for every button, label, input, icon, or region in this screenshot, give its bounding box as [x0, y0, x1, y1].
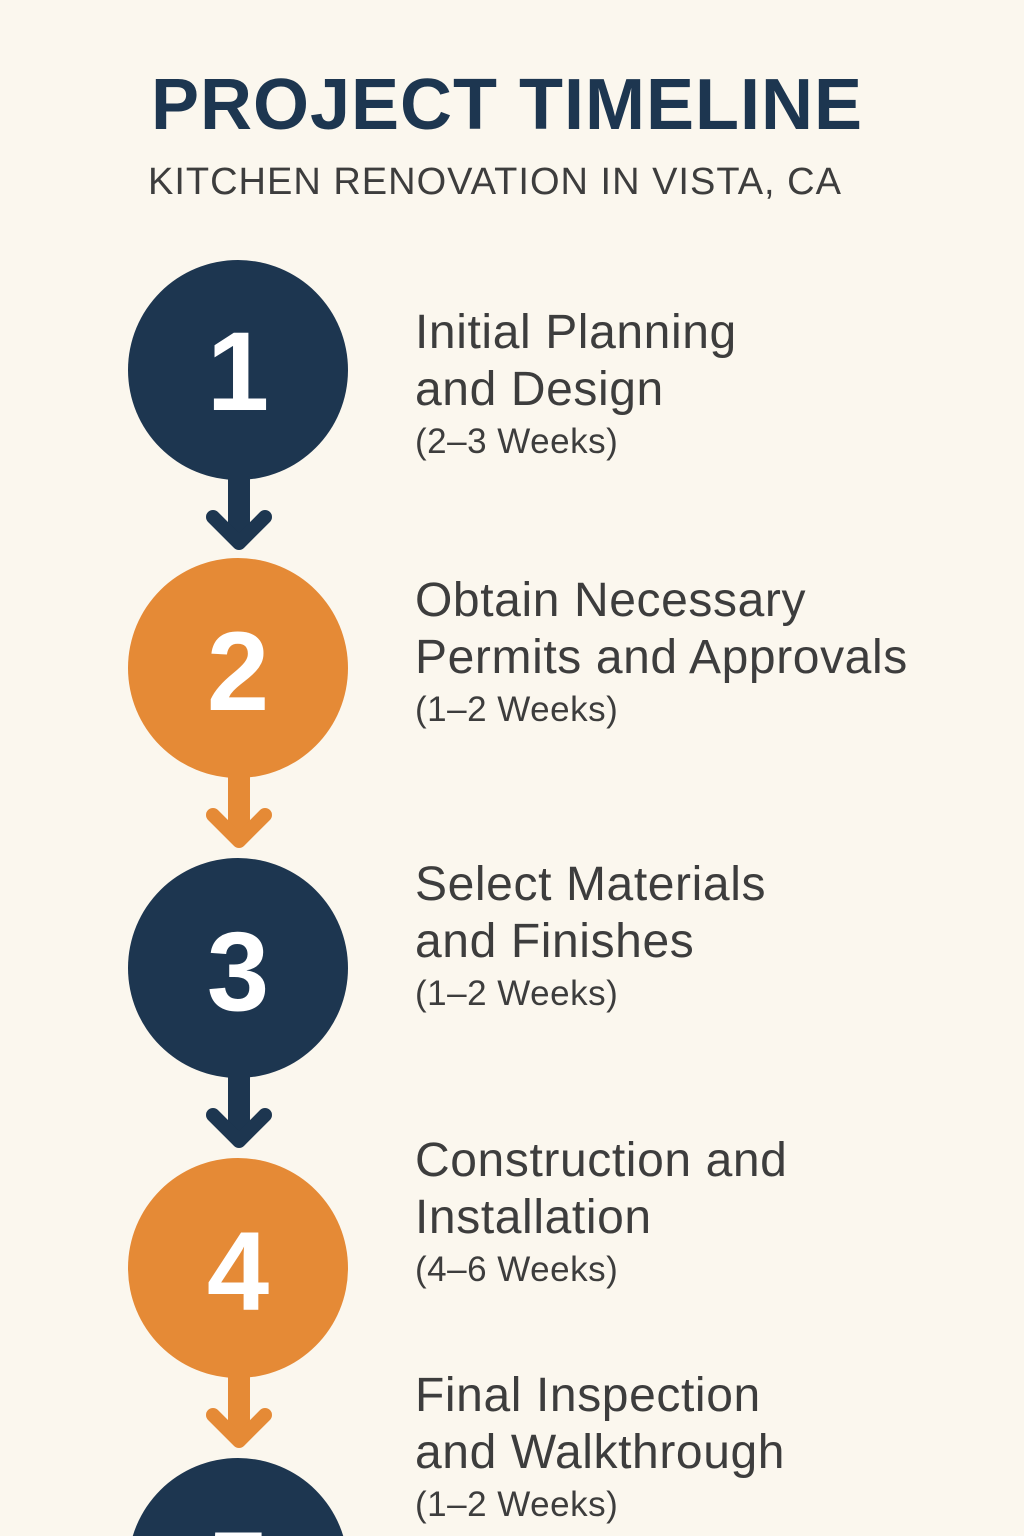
step 3 text: and Finishes — [415, 915, 694, 968]
step 1 text — [415, 306, 737, 461]
step 1 text: and Design — [415, 363, 664, 416]
step 2 text: Obtain Necessary — [415, 574, 806, 627]
step 5 text: Final Inspection — [415, 1369, 761, 1422]
step 1 circle — [128, 260, 348, 480]
step 4 circle: 4 — [207, 1209, 269, 1334]
step 4 circle — [128, 1158, 348, 1378]
step 4 text — [415, 1134, 787, 1289]
step 3 text — [415, 858, 766, 1013]
arrow 1 — [213, 470, 265, 543]
step 2 text: Permits and Approvals — [415, 631, 908, 684]
step 2 text — [415, 574, 908, 729]
step 5 text: (1–2 Weeks) — [415, 1485, 618, 1524]
step 3 circle: 3 — [207, 909, 269, 1034]
step 5 text: and Walkthrough — [415, 1426, 785, 1479]
step 1 text: (2–3 Weeks) — [415, 422, 618, 461]
step 5 text — [415, 1369, 785, 1524]
step 3 text: Select Materials — [415, 858, 766, 911]
step 5 circle — [128, 1458, 348, 1536]
step 2 text: (1–2 Weeks) — [415, 690, 618, 729]
arrow 2 — [213, 768, 265, 841]
step 4 text: (4–6 Weeks) — [415, 1250, 618, 1289]
step 4 text: Construction and — [415, 1134, 787, 1187]
arrow 3 — [213, 1068, 265, 1141]
title: PROJECT TIMELINE — [151, 65, 863, 145]
step 2 circle — [128, 558, 348, 778]
subtitle: KITCHEN RENOVATION IN VISTA, CA — [148, 161, 842, 203]
step 4 text: Installation — [415, 1191, 652, 1244]
arrow 4 — [213, 1368, 265, 1441]
step 3 circle — [128, 858, 348, 1078]
step 1 text: Initial Planning — [415, 306, 737, 359]
step 3 text: (1–2 Weeks) — [415, 974, 618, 1013]
step 2 circle: 2 — [207, 609, 269, 734]
step 1 circle: 1 — [207, 309, 269, 434]
